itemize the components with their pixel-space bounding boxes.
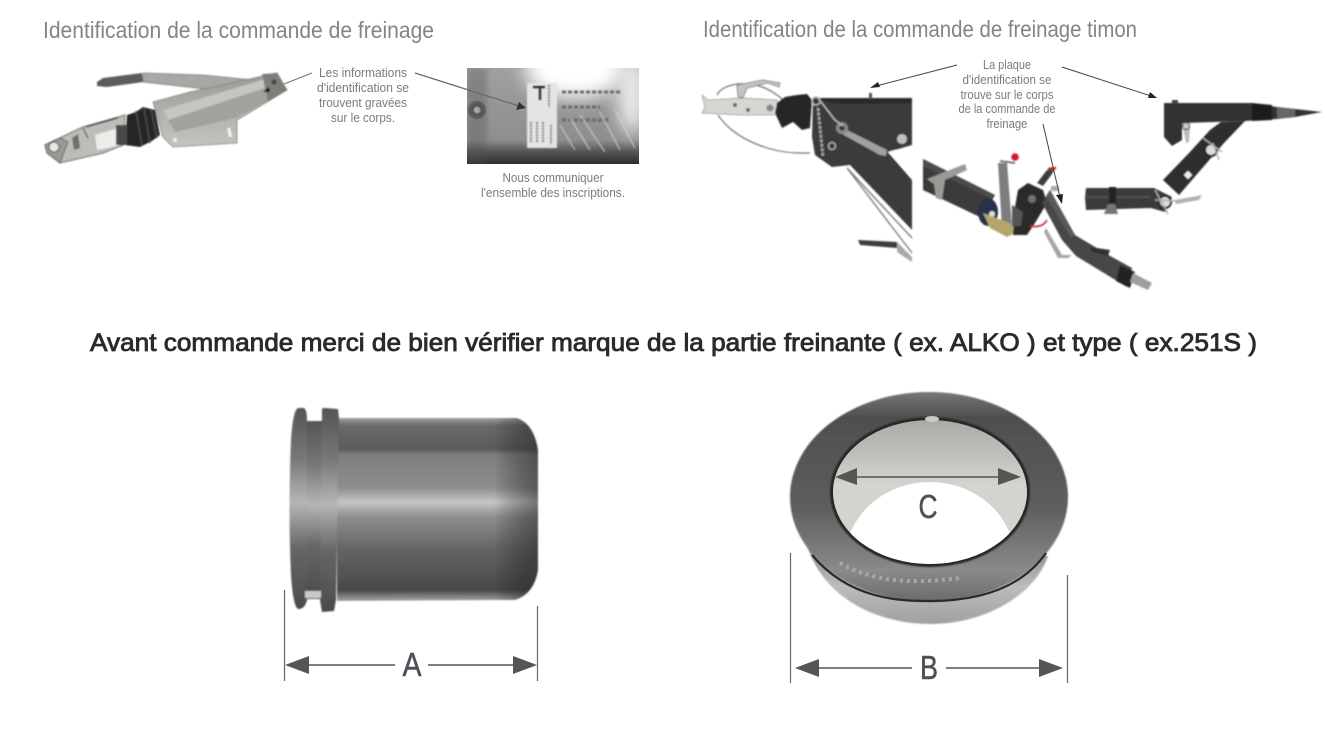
heading: identification commande de freinage: Identification de la commande de freinage [43, 17, 434, 43]
callout: la plaque d'identification: trouve sur le corps [960, 88, 1054, 102]
dimension A: A [402, 646, 422, 683]
arrow: plate, centre coupling [1043, 124, 1063, 204]
dimension A [284, 590, 538, 683]
callout: informations gravées sur le corps: sur le corps. [331, 111, 395, 125]
diagram: ring bushing [790, 392, 1068, 638]
caption: nous communiquer l'ensemble des inscriptions: l'ensemble des inscriptions. [481, 186, 625, 200]
callout: informations gravées sur le corps: d'identification se [317, 81, 409, 95]
photo: drawbar coupling, three-quarter view [923, 153, 1152, 290]
arrow: leader to coupling body [284, 73, 312, 84]
photo: coupling head with identification on body [45, 73, 287, 163]
photo: drawbar coupling, folded view [1085, 100, 1322, 214]
photo: engraved identification plate [467, 68, 639, 164]
photo: drawbar coupling, side view [702, 80, 912, 262]
callout: la plaque d'identification: de la commande de [958, 102, 1056, 116]
dimension B [790, 553, 1068, 686]
instruction sentence: Avant commande merci de bien vérifier marque de la partie freinante ( ex. ALKO ) et type ( ex.251S ) [90, 329, 1257, 357]
arrow: plate, left coupling [870, 65, 957, 88]
callout: la plaque d'identification: d'identification se [962, 73, 1052, 87]
heading: identification commande de freinage timon: Identification de la commande de freinage timon [703, 16, 1137, 42]
dimension C: C [918, 488, 938, 525]
callout: informations gravées sur le corps: Les informations [319, 66, 407, 80]
caption: nous communiquer l'ensemble des inscriptions [481, 171, 625, 200]
arrow: plate, right coupling [1062, 67, 1157, 98]
dimension C [835, 468, 1021, 525]
dimension B: B [920, 649, 938, 686]
caption: nous communiquer l'ensemble des inscriptions: Nous communiquer [502, 171, 604, 185]
callout: la plaque d'identification: freinage [986, 117, 1028, 131]
callout: informations gravées sur le corps: trouvent gravées [319, 96, 407, 110]
callout: la plaque d'identification [958, 58, 1056, 131]
callout: la plaque d'identification: La plaque [983, 58, 1031, 72]
arrow: to engraved plate [415, 73, 526, 110]
callout: informations gravées sur le corps [317, 66, 409, 125]
diagram: piston cylinder [290, 408, 538, 612]
